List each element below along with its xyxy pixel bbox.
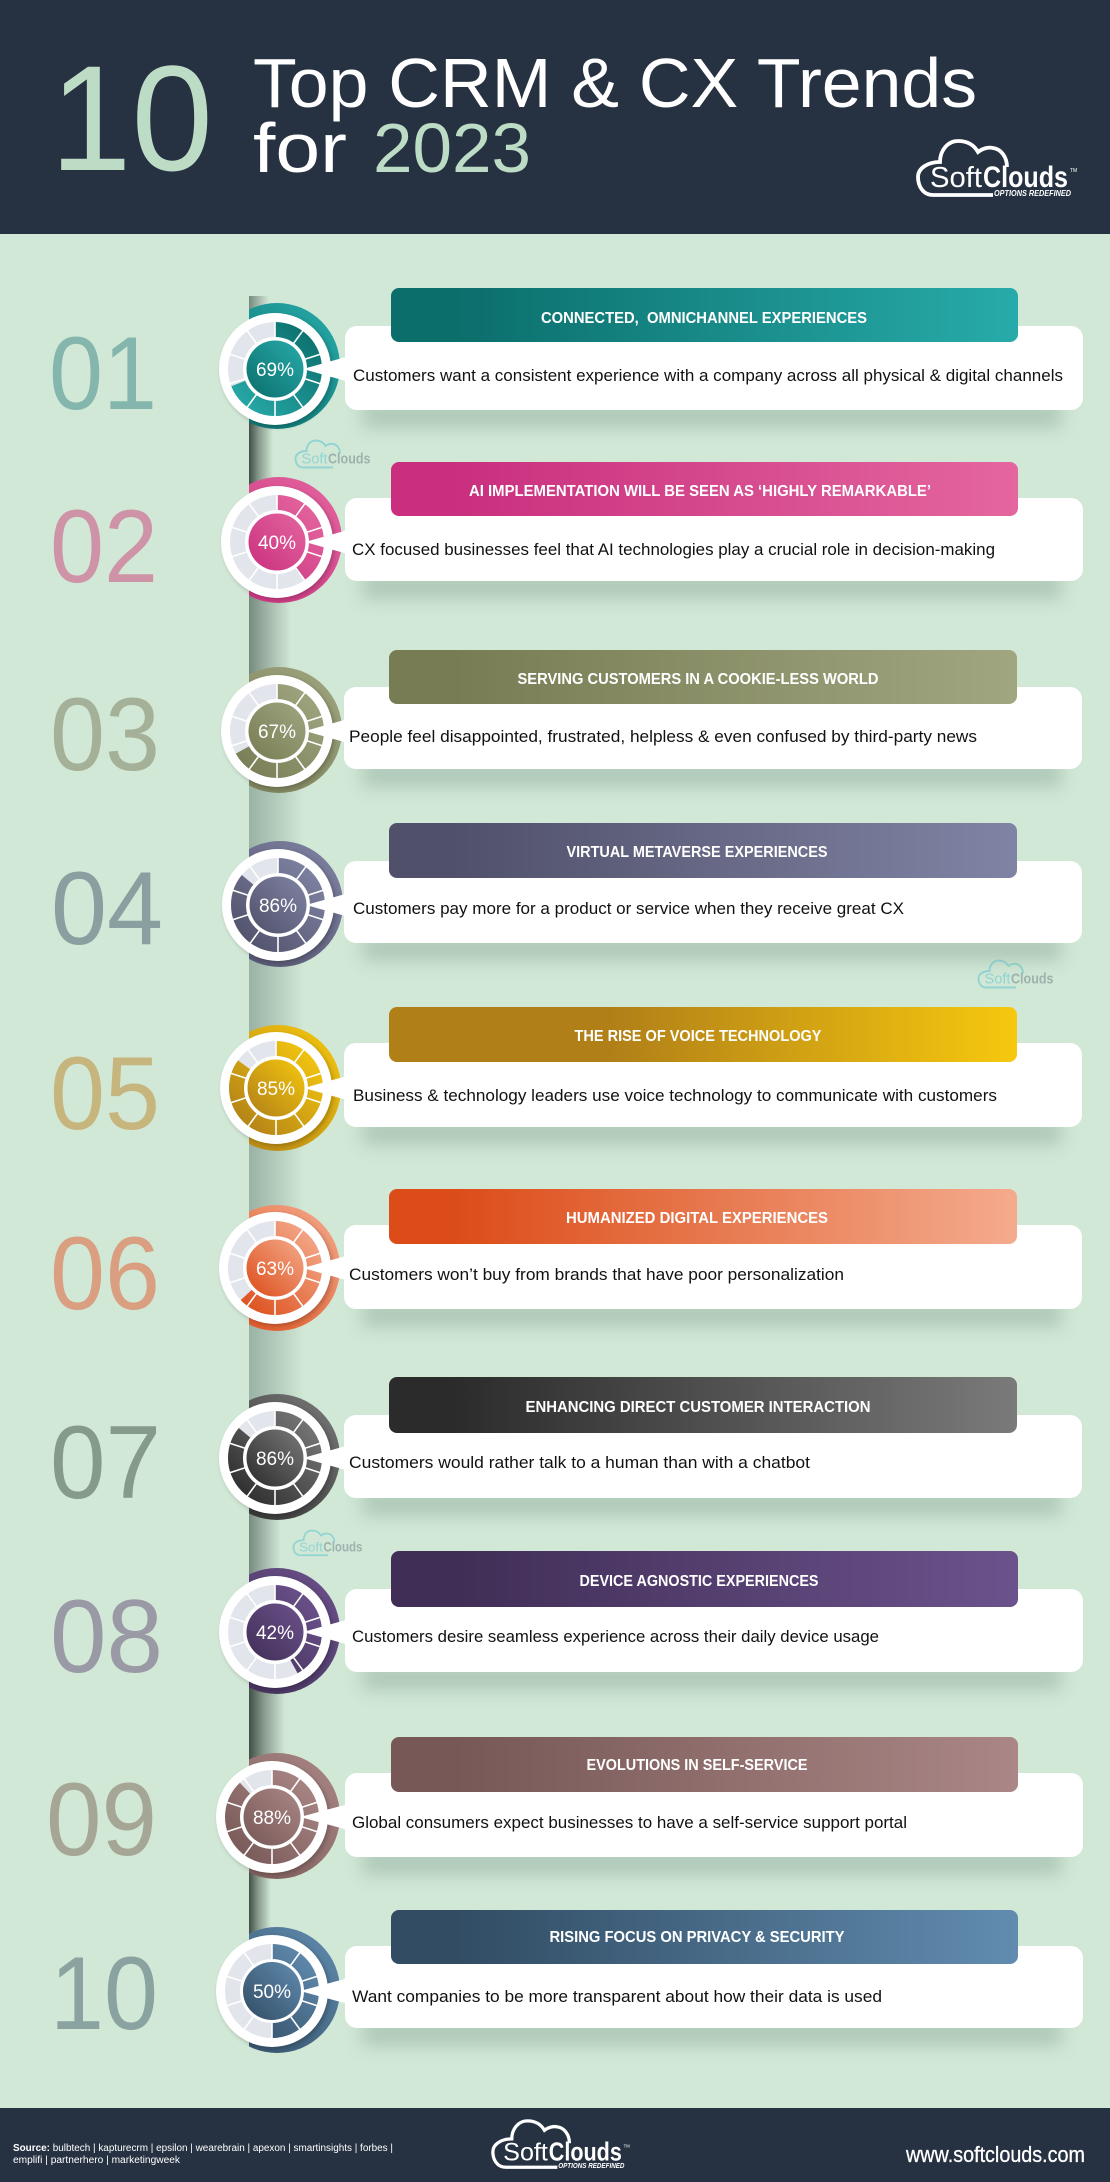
title line 1: Top CRM & CX Trends bbox=[253, 44, 977, 122]
number 05: 05 bbox=[50, 1036, 160, 1152]
number 07: 07 bbox=[50, 1405, 161, 1521]
description text: Customers won’t buy from brands that have poor personalization bbox=[349, 1265, 844, 1284]
footer band bbox=[0, 2108, 1110, 2182]
logo: SoftClouds footer: Soft bbox=[503, 2138, 548, 2166]
watermark logo 2: Clouds bbox=[1011, 970, 1054, 988]
title text: ENHANCING DIRECT CUSTOMER INTERACTION bbox=[526, 1399, 870, 1416]
description card bbox=[344, 687, 1082, 769]
title bar bbox=[389, 1189, 1017, 1244]
watermark logo 3 bbox=[293, 1530, 363, 1555]
description card bbox=[344, 1415, 1082, 1498]
gauge 86%: 86% bbox=[256, 1449, 294, 1470]
title bar bbox=[389, 650, 1017, 704]
description text: Business & technology leaders use voice technology to communicate with customers bbox=[353, 1086, 997, 1105]
description text: People feel disappointed, frustrated, helpless & even confused by third-party news bbox=[349, 727, 977, 746]
title bar bbox=[391, 1737, 1018, 1792]
gauge 42% bbox=[214, 1568, 353, 1694]
gauge 88% bbox=[214, 1753, 352, 1879]
gauge 85%: 85% bbox=[257, 1079, 295, 1100]
title bar bbox=[389, 1007, 1017, 1062]
watermark logo 3: Clouds bbox=[323, 1540, 363, 1555]
source list: Source: bulbtech | kapturecrm | epsilon | wearebrain | apexon | smartinsights | forbes | bbox=[13, 2143, 393, 2154]
gauge 86%: 86% bbox=[259, 896, 297, 917]
gauge 63% bbox=[219, 1205, 344, 1331]
gauge 40%: 40% bbox=[258, 533, 296, 554]
number 01: 01 bbox=[49, 316, 157, 432]
gauge 86% bbox=[222, 841, 344, 967]
title text: RISING FOCUS ON PRIVACY & SECURITY bbox=[550, 1929, 845, 1946]
description card bbox=[344, 1043, 1082, 1127]
gauge 67% bbox=[221, 667, 344, 793]
logo: SoftClouds footer: TM bbox=[624, 2144, 630, 2149]
watermark logo 2: Soft bbox=[984, 972, 1010, 988]
title text: DEVICE AGNOSTIC EXPERIENCES bbox=[580, 1573, 819, 1590]
title bar bbox=[391, 462, 1018, 516]
gauge 69%: 69% bbox=[256, 360, 294, 381]
title line 2: 2023 bbox=[373, 109, 531, 187]
gauge 42%: 42% bbox=[256, 1623, 294, 1644]
number 03: 03 bbox=[50, 677, 160, 793]
number 09: 09 bbox=[46, 1762, 157, 1878]
trend 04 bbox=[51, 823, 1082, 967]
logo: SoftClouds footer: OPTIONS REDEFINED bbox=[558, 2161, 625, 2170]
number 10: 10 bbox=[50, 1936, 158, 2052]
description text: Customers would rather talk to a human than with a chatbot bbox=[349, 1453, 810, 1472]
header band bbox=[0, 0, 1110, 234]
description card bbox=[345, 326, 1083, 410]
description card bbox=[344, 1225, 1082, 1309]
trend 07 bbox=[50, 1377, 1082, 1521]
description card bbox=[345, 498, 1083, 581]
logo: SoftClouds footer bbox=[493, 2121, 630, 2170]
description card bbox=[345, 1773, 1083, 1857]
trend 02 bbox=[50, 462, 1083, 605]
trend 06 bbox=[50, 1189, 1082, 1332]
watermark logo 1: Soft bbox=[302, 452, 328, 468]
gauge 86% bbox=[219, 1394, 344, 1520]
title line 2 bbox=[253, 109, 531, 187]
title bar bbox=[389, 1377, 1017, 1433]
number 04: 04 bbox=[51, 851, 163, 967]
gauge 85% bbox=[220, 1025, 344, 1151]
number 02: 02 bbox=[50, 489, 158, 605]
gauge 69% bbox=[214, 303, 353, 429]
description card bbox=[344, 861, 1082, 943]
gauge 63%: 63% bbox=[256, 1259, 294, 1280]
title bar bbox=[391, 1551, 1018, 1607]
description text: Customers want a consistent experience with a company across all physical & digital channels bbox=[353, 366, 1063, 385]
logo: SoftClouds header bbox=[918, 141, 1077, 198]
description text: Customers pay more for a product or service when they receive great CX bbox=[353, 899, 904, 918]
title text: SERVING CUSTOMERS IN A COOKIE-LESS WORLD bbox=[518, 671, 878, 688]
description text: Global consumers expect businesses to have a self-service support portal bbox=[352, 1813, 907, 1832]
title text: EVOLUTIONS IN SELF-SERVICE bbox=[586, 1757, 808, 1774]
trend 09 bbox=[46, 1737, 1083, 1879]
trend 01 bbox=[49, 288, 1083, 432]
logo: SoftClouds header: OPTIONS REDEFINED bbox=[994, 188, 1071, 198]
logo: SoftClouds header: Clouds bbox=[983, 161, 1068, 194]
website: www.softclouds.com bbox=[905, 2142, 1085, 2167]
title text: THE RISE OF VOICE TECHNOLOGY bbox=[574, 1028, 822, 1045]
title line 2: for bbox=[253, 109, 347, 187]
number 08: 08 bbox=[50, 1579, 163, 1695]
watermark logo 3: Soft bbox=[299, 1540, 323, 1555]
title text: AI IMPLEMENTATION WILL BE SEEN AS ‘HIGHLY REMARKABLE’ bbox=[469, 483, 931, 500]
logo: SoftClouds header: Soft bbox=[930, 162, 982, 194]
source list: emplifi | partnerhero | marketingweek bbox=[13, 2155, 181, 2166]
gauge 67%: 67% bbox=[258, 722, 296, 743]
gauge 50%: 50% bbox=[253, 1982, 291, 2003]
watermark logo 1: Clouds bbox=[328, 450, 370, 468]
number 06: 06 bbox=[50, 1216, 160, 1332]
title bar bbox=[391, 288, 1018, 342]
title bar bbox=[389, 823, 1017, 878]
title text: VIRTUAL METAVERSE EXPERIENCES bbox=[566, 844, 828, 861]
trend 08 bbox=[50, 1551, 1083, 1695]
logo: SoftClouds header: TM bbox=[1070, 168, 1077, 174]
description text: CX focused businesses feel that AI technologies play a crucial role in decision-making bbox=[352, 540, 995, 559]
watermark logo 1 bbox=[296, 440, 370, 468]
trend 05 bbox=[50, 1007, 1082, 1152]
big number 10: 10 bbox=[50, 34, 213, 202]
description card bbox=[345, 1589, 1083, 1672]
trend 10 bbox=[50, 1910, 1083, 2053]
title bar bbox=[391, 1910, 1018, 1964]
gauge 50% bbox=[214, 1927, 352, 2053]
description text: Customers desire seamless experience across their daily device usage bbox=[352, 1627, 879, 1646]
gauge 88%: 88% bbox=[253, 1808, 291, 1829]
description card bbox=[345, 1946, 1083, 2028]
title text: HUMANIZED DIGITAL EXPERIENCES bbox=[566, 1210, 828, 1227]
source list bbox=[13, 2143, 393, 2166]
description text: Want companies to be more transparent about how their data is used bbox=[352, 1987, 882, 2006]
logo: SoftClouds footer: Clouds bbox=[549, 2138, 622, 2166]
vertical timeline shadow bbox=[249, 296, 304, 1991]
watermark logo 2 bbox=[978, 960, 1054, 988]
trend 03 bbox=[50, 650, 1082, 793]
title text: CONNECTED, OMNICHANNEL EXPERIENCES bbox=[541, 310, 867, 327]
gauge 40% bbox=[221, 477, 345, 603]
